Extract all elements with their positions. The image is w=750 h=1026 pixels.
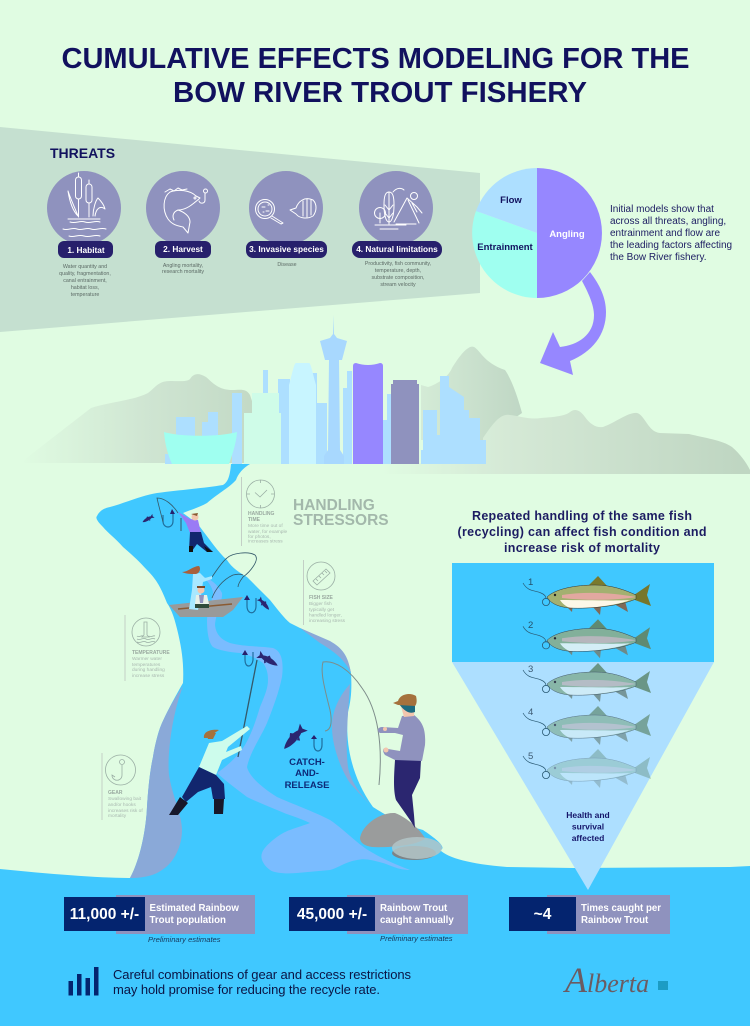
stressor: handling time: HANDLING bbox=[248, 511, 274, 517]
stressor: fish size: increasing stress bbox=[309, 618, 346, 624]
fish 5: 5 bbox=[528, 751, 533, 762]
stressor: gear: increases risk of bbox=[108, 808, 143, 814]
text: initial models: across all threats, angling, bbox=[610, 216, 726, 227]
stat: population: Estimated Rainbow bbox=[150, 903, 239, 914]
icon: hook bbox=[106, 755, 136, 785]
rocks bbox=[360, 813, 425, 847]
text: natural limitations description: substrate composition, bbox=[372, 275, 424, 281]
title: CUMULATIVE EFFECTS MODELING FOR THE bbox=[62, 43, 690, 75]
small fish and hooks bbox=[141, 509, 322, 753]
stressor: temperature: Warmer water bbox=[132, 656, 162, 662]
icon: magnifier and fish bbox=[256, 199, 316, 224]
pill: habitat: 1. Habitat bbox=[67, 245, 105, 255]
text: natural limitations description: stream velocity bbox=[380, 282, 416, 288]
pie labels: Entrainment bbox=[477, 242, 534, 253]
title: BOW RIVER TROUT FISHERY bbox=[173, 77, 587, 109]
icon: thermometer bbox=[132, 618, 160, 646]
text: initial models: Initial models show that bbox=[610, 204, 714, 215]
fish 3 bbox=[523, 663, 651, 702]
text: catch-and-release: RELEASE bbox=[285, 780, 329, 791]
threat 3: invasive species bbox=[246, 171, 327, 268]
landscape: hills bbox=[20, 347, 750, 474]
river bbox=[96, 464, 750, 880]
stat: times caught bbox=[509, 895, 670, 934]
angler: top bank bbox=[157, 498, 213, 552]
heading: handling stressors bbox=[293, 497, 389, 529]
text: habitat description: canal entrainment, bbox=[63, 278, 107, 284]
text: health and survival affected: affected bbox=[572, 833, 604, 843]
text: habitat description: quality, fragmentation, bbox=[59, 271, 111, 277]
arrow: pie to city bbox=[540, 272, 606, 375]
icon: ruler bbox=[307, 562, 335, 590]
fish 2 bbox=[523, 619, 651, 658]
threat 1: habitat bbox=[47, 171, 121, 298]
icon: cattails and water bbox=[63, 173, 106, 237]
head and hat bbox=[400, 703, 415, 717]
text: natural limitations description bbox=[365, 261, 431, 288]
text: catch-and-release: AND- bbox=[295, 768, 319, 779]
stressor: handling time: increases stress bbox=[248, 538, 283, 544]
threat 2: harvest bbox=[146, 171, 220, 275]
text: catch-and-release: CATCH- bbox=[289, 757, 325, 768]
stressor: gear: and/or hooks bbox=[108, 802, 136, 808]
stressor: fish size: typically get bbox=[309, 607, 335, 613]
text: harvest description: Angling mortality, bbox=[163, 263, 203, 269]
icon: bar chart bbox=[68, 967, 98, 996]
text: habitat description bbox=[59, 264, 111, 298]
building: grey-purple tower bbox=[391, 380, 419, 464]
logo: Alberta: Alberta bbox=[563, 960, 649, 1000]
stressor: fish size: FISH SIZE bbox=[309, 595, 334, 601]
pill: invasive species: 3. Invasive species bbox=[249, 244, 324, 254]
panel: threats funnel bbox=[0, 127, 480, 332]
fish 3: 3 bbox=[528, 664, 533, 675]
angler: boat bbox=[169, 553, 256, 617]
building: purple tower bbox=[353, 363, 383, 464]
heading: repeated handling bbox=[458, 509, 706, 555]
text: natural limitations description: temperature, depth, bbox=[375, 268, 421, 274]
stat: population: Trout population bbox=[150, 915, 226, 926]
fish 5 bbox=[523, 749, 651, 788]
stat: annual catch: 45,000 +/- bbox=[297, 906, 367, 923]
text: initial models: the leading factors affecting bbox=[610, 240, 732, 251]
text: catch-and-release bbox=[285, 757, 329, 791]
boat hull bbox=[169, 597, 243, 617]
icon: trees and mountains bbox=[374, 188, 422, 229]
woman bbox=[189, 573, 212, 610]
building: stepped tower bbox=[421, 376, 486, 464]
pie labels bbox=[477, 195, 585, 253]
stat: times caught: Rainbow Trout bbox=[581, 915, 649, 926]
heading: handling stressors: STRESSORS bbox=[293, 512, 389, 529]
stressor: temperature: TEMPERATURE bbox=[132, 650, 170, 656]
text: health and survival affected bbox=[566, 810, 610, 843]
light river channel bbox=[203, 577, 410, 873]
panel: recycling funnel bbox=[452, 563, 714, 890]
building: mint tower bbox=[244, 393, 281, 464]
stressor: handling time: water, for example bbox=[248, 529, 288, 535]
heading: threats: THREATS bbox=[50, 145, 115, 161]
text: careful combinations: may hold promise for reducing the recycle rate. bbox=[113, 982, 380, 997]
heading: repeated handling: increase risk of mortality bbox=[504, 541, 660, 555]
angler: wading left bbox=[169, 660, 257, 815]
stat: annual catch bbox=[289, 895, 468, 934]
text: initial models: entrainment and flow are bbox=[610, 228, 721, 239]
stressor: fish size bbox=[304, 560, 346, 625]
fish 1: 1 bbox=[528, 577, 533, 588]
heading: repeated handling: Repeated handling of the same fish bbox=[472, 509, 692, 523]
text: initial models: the Bow River fishery. bbox=[610, 252, 707, 263]
stressor: fish size: handled longer, bbox=[309, 612, 342, 618]
stressor: handling time bbox=[242, 477, 288, 546]
stressor: gear: Swallowing bait bbox=[108, 796, 142, 802]
stressor: handling time: TIME bbox=[248, 517, 261, 523]
stat: population bbox=[64, 895, 255, 934]
text: careful combinations: Careful combinations of gear and access restrictions bbox=[113, 967, 412, 982]
stressor: gear bbox=[102, 753, 143, 820]
city skyline bbox=[164, 315, 486, 464]
stressor: fish size: Bigger fish bbox=[309, 601, 332, 607]
stressor: gear: mortality bbox=[108, 813, 127, 819]
title bbox=[62, 43, 690, 109]
torso and arms bbox=[378, 715, 425, 761]
icon: jumping fish bbox=[164, 188, 208, 233]
stressor: temperature: during handling bbox=[132, 667, 165, 673]
text: natural limitations description: Productivity, fish community, bbox=[365, 261, 431, 267]
text: invasive description: Disease bbox=[277, 262, 297, 268]
stressor: temperature: increase stress bbox=[132, 673, 165, 679]
building: Calgary Tower bbox=[320, 315, 347, 464]
stat: times caught: Times caught per bbox=[581, 903, 661, 914]
stat: population: 11,000 +/- bbox=[70, 906, 139, 923]
stressor: handling time: More time out of bbox=[248, 523, 283, 529]
icon: clock bbox=[246, 480, 274, 508]
text: habitat description: Water quantity and bbox=[63, 264, 107, 270]
river bank shading bbox=[130, 628, 373, 878]
legs bbox=[394, 760, 421, 828]
threat 4: natural limitations bbox=[352, 171, 442, 288]
text: harvest description: research mortality bbox=[162, 269, 204, 275]
text: initial models bbox=[610, 204, 732, 263]
heading: handling stressors: HANDLING bbox=[293, 497, 375, 514]
building: stadium bbox=[164, 432, 237, 464]
stressor: temperature: temperatures bbox=[132, 662, 161, 668]
pill: natural limitations: 4. Natural limitations bbox=[356, 244, 438, 254]
stat: times caught: ~4 bbox=[534, 906, 552, 923]
fish 4: 4 bbox=[528, 707, 533, 718]
seated man bbox=[198, 586, 204, 594]
pie labels: Angling bbox=[549, 229, 585, 240]
fish 1 bbox=[523, 576, 651, 615]
stressor: handling time: for photos, bbox=[248, 534, 271, 540]
angler: right on rocks bbox=[322, 662, 442, 860]
stressor: temperature bbox=[125, 615, 170, 681]
note: preliminary estimates 1: Preliminary estimates bbox=[148, 935, 221, 944]
chart: pie of leading threats bbox=[472, 168, 602, 298]
text: harvest description bbox=[162, 263, 204, 275]
heading: repeated handling: (recycling) can affect fish condition and bbox=[458, 525, 706, 539]
pill: harvest: 2. Harvest bbox=[163, 244, 203, 254]
text: health and survival affected: Health and bbox=[566, 810, 610, 820]
note: preliminary estimates 2: Preliminary estimates bbox=[380, 934, 453, 943]
bottom water bbox=[0, 869, 750, 1026]
text: health and survival affected: survival bbox=[572, 822, 604, 832]
text: habitat description: temperature bbox=[71, 292, 99, 298]
building: pale tower bbox=[289, 363, 316, 464]
fish 4 bbox=[523, 706, 651, 745]
stat: annual catch: Rainbow Trout bbox=[380, 903, 448, 914]
pie labels: Flow bbox=[500, 195, 522, 206]
stressor: gear: GEAR bbox=[108, 790, 123, 796]
text: habitat description: habitat loss, bbox=[71, 285, 99, 291]
fish 2: 2 bbox=[528, 620, 533, 631]
text: careful combinations bbox=[113, 967, 412, 997]
stat: annual catch: caught annually bbox=[380, 915, 454, 926]
